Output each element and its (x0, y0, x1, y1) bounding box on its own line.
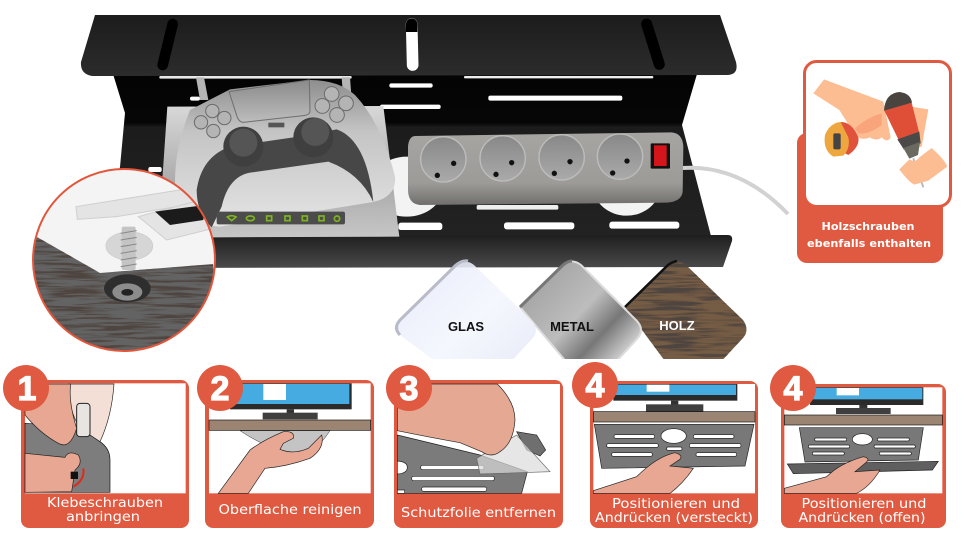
rack slots and openings (148, 18, 679, 230)
step 1 label: Klebeschrauben (47, 495, 163, 511)
step 4 open label: Andrücken (offen) (798, 510, 926, 526)
power strip (408, 132, 683, 205)
sample: wood: HOLZ (659, 318, 695, 333)
orange caption card (797, 133, 943, 263)
wood desk surface (34, 237, 214, 350)
game controller on console (158, 77, 399, 237)
step 3 label: Schutzfolie entfernen (401, 505, 556, 521)
material samples (394, 259, 746, 359)
step 2 label: Oberflache reinigen (218, 502, 362, 518)
rack back wall and floor (100, 74, 711, 236)
card frame (394, 380, 563, 528)
inset: adhesive screw close-up (30, 169, 220, 360)
card frame (21, 380, 189, 528)
number badge 3 (386, 365, 432, 411)
step 4 hidden label: Andrücken (versteckt) (595, 510, 753, 526)
step 4 open label (798, 496, 926, 526)
card frame (205, 380, 374, 528)
step 3 illustration (397, 384, 560, 493)
step 4 open illustration (784, 387, 942, 493)
caption: Holzschrauben (822, 220, 914, 233)
number badge 4: 4 (586, 367, 605, 405)
clear bracket (76, 187, 213, 260)
step 3 card (386, 365, 563, 528)
card frame (590, 381, 758, 528)
step 2 illustration (209, 383, 371, 493)
step 4 hidden label: Positionieren und (612, 496, 740, 512)
panel: wood screws included (797, 62, 950, 263)
number badge 2: 2 (211, 370, 229, 408)
number badge 1 (3, 365, 49, 411)
rack top flap (81, 15, 737, 76)
number badge 4 open (770, 365, 816, 411)
step 4 hidden label (595, 496, 753, 526)
icon: hand with drill (813, 79, 947, 187)
sample: wood (624, 260, 746, 359)
step 4 open mounting card (770, 365, 946, 528)
sample: glass: GLAS (448, 319, 484, 334)
step 4 hidden illustration (593, 384, 755, 493)
step 1 label (47, 495, 163, 525)
step 1 card (3, 365, 189, 528)
sample: glass (394, 259, 536, 359)
card frame (781, 384, 946, 528)
step 2 card (197, 365, 374, 528)
number badge 1: 1 (18, 370, 36, 408)
step 4 hidden mounting card (572, 362, 758, 528)
number badge 4 open: 4 (784, 370, 803, 408)
number badge 4 (572, 362, 618, 408)
step 1 label: anbringen (66, 509, 140, 525)
number badge 3: 3 (400, 370, 418, 408)
rack front lip (100, 235, 732, 268)
threaded screw and knurled nut (104, 227, 151, 302)
white image card (804, 62, 950, 206)
cable rack product photo (81, 15, 788, 268)
caption (807, 220, 931, 250)
number badge 2 (197, 365, 243, 411)
caption: ebenfalls enthalten (807, 237, 931, 250)
sample: metal: METAL (550, 319, 594, 334)
power cord (682, 168, 788, 214)
step 4 open label: Positionieren und (802, 496, 926, 512)
sample: metal (518, 260, 642, 359)
step 1 illustration (25, 383, 186, 493)
